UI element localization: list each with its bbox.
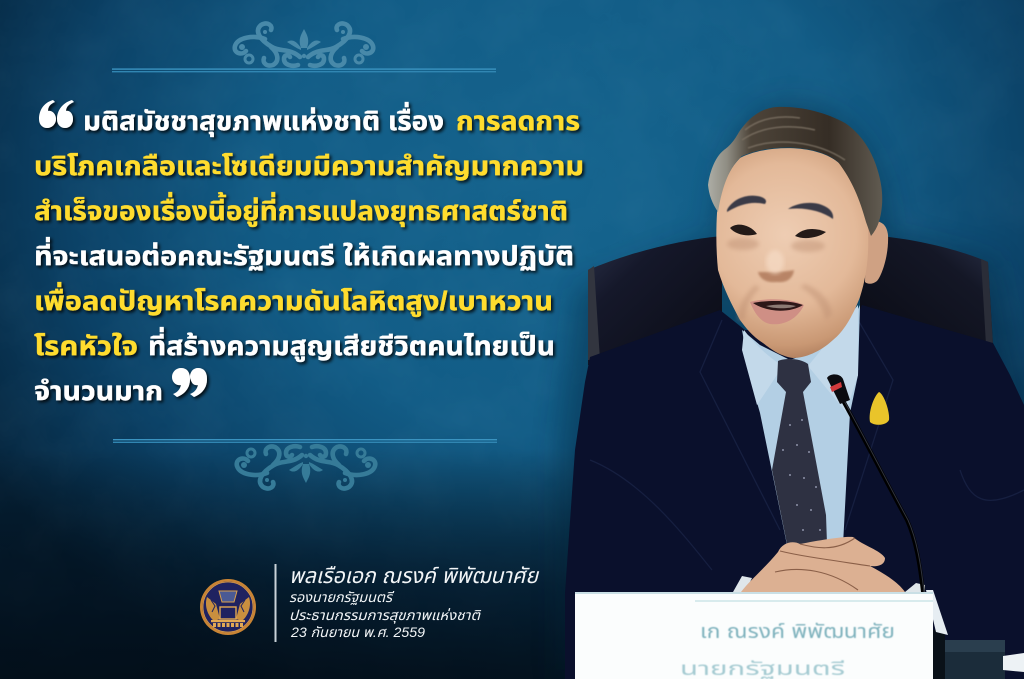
signature block bbox=[289, 564, 539, 640]
mouth bbox=[750, 299, 804, 324]
collar bbox=[742, 305, 858, 412]
lapel pin bbox=[870, 392, 889, 425]
signature divider bbox=[274, 564, 276, 642]
ear bbox=[865, 221, 888, 284]
nameplate name: เก ณรงค์ พิพัฒนาศัย bbox=[700, 621, 895, 643]
eyebrows bbox=[727, 196, 833, 219]
halo shadow bbox=[560, 104, 1024, 679]
line 1: มติสมัชชาสุขภาพแห่งชาติ เรื่อง bbox=[83, 102, 444, 137]
person photo illustration bbox=[560, 104, 1024, 679]
paper bbox=[1003, 653, 1024, 672]
line 6 bbox=[34, 327, 555, 362]
line 5: เพื่อลดปัญหาโรคความดันโลหิตสูง/เบาหวาน bbox=[34, 282, 553, 317]
name: พลเรือเอก ณรงค์ พิพัฒนาศัย bbox=[289, 564, 539, 588]
hair bbox=[708, 107, 882, 236]
necktie bbox=[772, 359, 827, 544]
suit lapels bbox=[590, 320, 1024, 570]
nose bbox=[758, 250, 794, 282]
closing quote mark bbox=[172, 368, 207, 397]
line 1 bbox=[83, 102, 580, 137]
hair highlights bbox=[742, 117, 845, 160]
microphone bbox=[827, 374, 924, 592]
shirt bbox=[742, 305, 860, 545]
line 2: บริโภคเกลือและโซเดียมมีความสำคัญมากความ bbox=[34, 151, 584, 181]
seal emblem bbox=[200, 579, 256, 635]
nameplate bbox=[575, 592, 933, 679]
suit bbox=[565, 305, 1024, 679]
line 4: ที่จะเสนอต่อคณะรัฐมนตรี ให้เกิดผลทางปฏิบัติ bbox=[34, 237, 574, 271]
chair back bbox=[588, 236, 993, 365]
line 3: สำเร็จของเรื่องนี้อยู่ที่การแปลงยุทธศาสตร์ชาติ bbox=[34, 192, 568, 227]
face bbox=[716, 148, 868, 358]
eye area shadow bbox=[727, 238, 832, 320]
bottom divider line bbox=[113, 439, 497, 443]
line 1: การลดการ bbox=[456, 106, 580, 136]
quote text block bbox=[34, 100, 584, 406]
line 6: ที่สร้างความสูญเสียชีวิตคนไทยเป็น bbox=[148, 327, 555, 362]
line 7: จำนวนมาก bbox=[34, 376, 163, 406]
bottom ornament bbox=[237, 446, 375, 488]
opening quote mark bbox=[39, 100, 74, 128]
hands bbox=[733, 537, 925, 592]
top ornament bbox=[235, 24, 373, 66]
position 1: รองนายกรัฐมนตรี bbox=[289, 589, 395, 605]
white sleeve edge bbox=[926, 590, 948, 635]
top divider line bbox=[112, 68, 496, 72]
position 2: ประธานกรรมการสุขภาพแห่งชาติ bbox=[289, 607, 482, 624]
line 6: โรคหัวใจ bbox=[34, 331, 138, 361]
date: 23 กันยายน พ.ศ. 2559 bbox=[290, 624, 425, 640]
nameplate base bbox=[933, 630, 1005, 679]
eyes bbox=[730, 225, 826, 238]
